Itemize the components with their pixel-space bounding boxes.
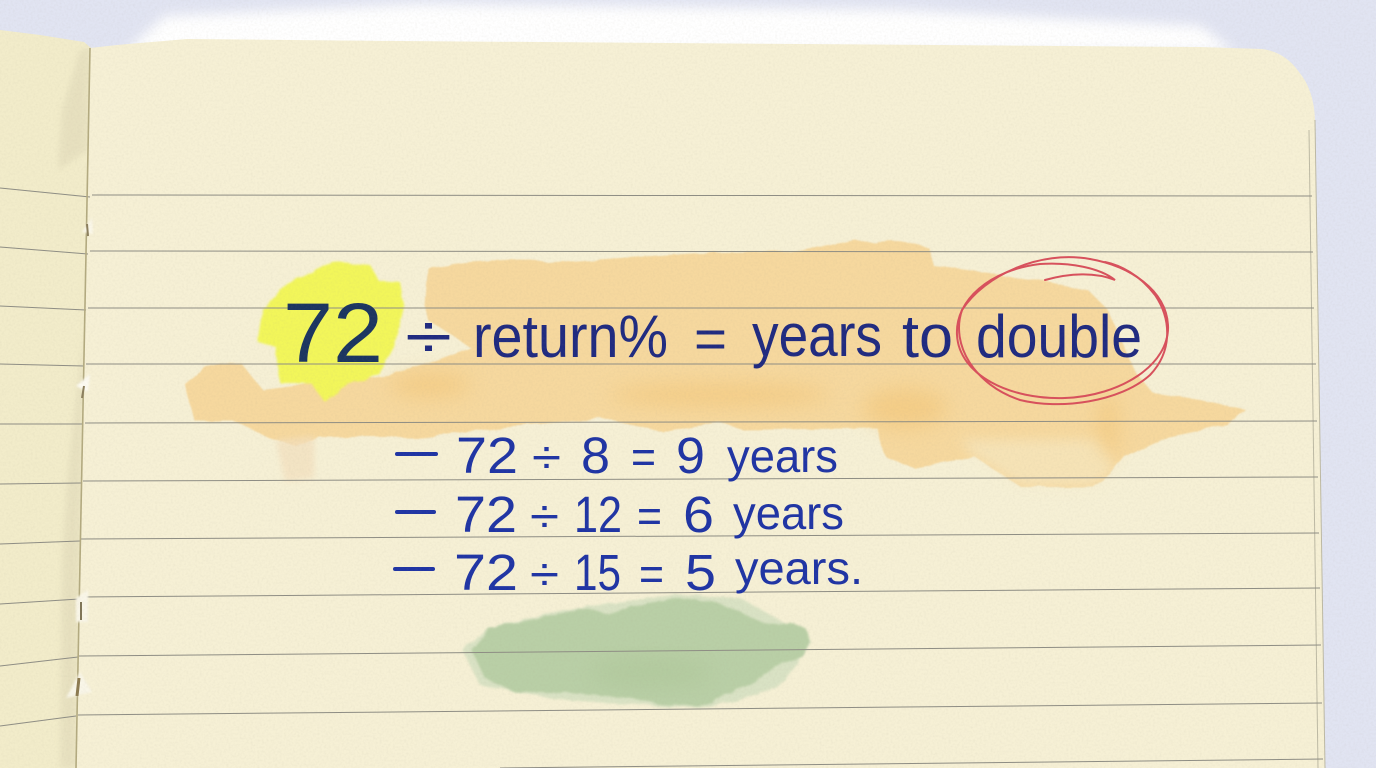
main formula <box>283 286 1142 380</box>
example line 2: 72 / 12 = 6 years: 6 <box>683 486 714 543</box>
word years: years <box>733 487 844 539</box>
red hand-drawn circle around double <box>957 257 1168 404</box>
example line 2: 72 / 12 = 6 years <box>395 486 844 543</box>
numbers: 72 <box>455 486 517 543</box>
word to: to <box>902 303 953 370</box>
word return percent: return% <box>473 303 668 370</box>
word years: years <box>727 430 838 482</box>
darker pigment blooms <box>390 373 1118 457</box>
green watercolor wash <box>462 595 812 708</box>
dash <box>393 567 435 571</box>
yellow highlighter blob behind 72 <box>258 262 404 402</box>
equals sign: = <box>694 307 727 370</box>
dash <box>395 452 438 456</box>
example line 3: 72 / 15 = 5 years: 15 <box>574 544 621 601</box>
words years to: years <box>752 302 882 369</box>
lighter lower lobe of the wash <box>960 440 1115 487</box>
word double: double <box>976 303 1142 370</box>
example line 1: 72 / 8 = 9 years: ÷ <box>532 431 561 483</box>
example line 3: 72 / 15 = 5 years <box>393 542 863 601</box>
stacked page edges at right <box>1309 120 1325 768</box>
faint drip below wash <box>276 436 314 482</box>
example line 3: 72 / 15 = 5 years: ÷ <box>530 548 559 600</box>
shadow near the spine on left page <box>58 48 90 768</box>
highlighted number 72: 72 <box>283 286 383 380</box>
binding threads <box>66 218 93 698</box>
orange watercolor wash <box>185 239 1246 487</box>
example line 1: 72 / 8 = 9 years: 8 <box>581 427 610 484</box>
light glare along top edge <box>125 4 1235 52</box>
divide sign: ÷ <box>405 303 452 372</box>
example line 1: 72 / 8 = 9 years <box>395 427 838 484</box>
green light halo <box>462 595 812 708</box>
example line 2: 72 / 12 = 6 years: 12 <box>574 486 622 543</box>
green darker center <box>590 656 710 688</box>
example line 2: 72 / 12 = 6 years: ÷ <box>530 490 559 542</box>
spine fold <box>76 48 90 768</box>
numbers: 72 <box>454 544 518 601</box>
example line 3: 72 / 15 = 5 years: = <box>639 548 664 600</box>
word years with period: years. <box>735 542 863 594</box>
numbers: 72 <box>456 427 518 484</box>
dash <box>395 510 436 514</box>
example line 3: 72 / 15 = 5 years: 5 <box>685 544 716 601</box>
left notebook page <box>0 30 91 768</box>
example line 1: 72 / 8 = 9 years: 9 <box>676 427 705 484</box>
ruled lines <box>0 188 1323 768</box>
example line 1: 72 / 8 = 9 years: = <box>631 431 656 483</box>
example line 2: 72 / 12 = 6 years: = <box>637 490 662 542</box>
